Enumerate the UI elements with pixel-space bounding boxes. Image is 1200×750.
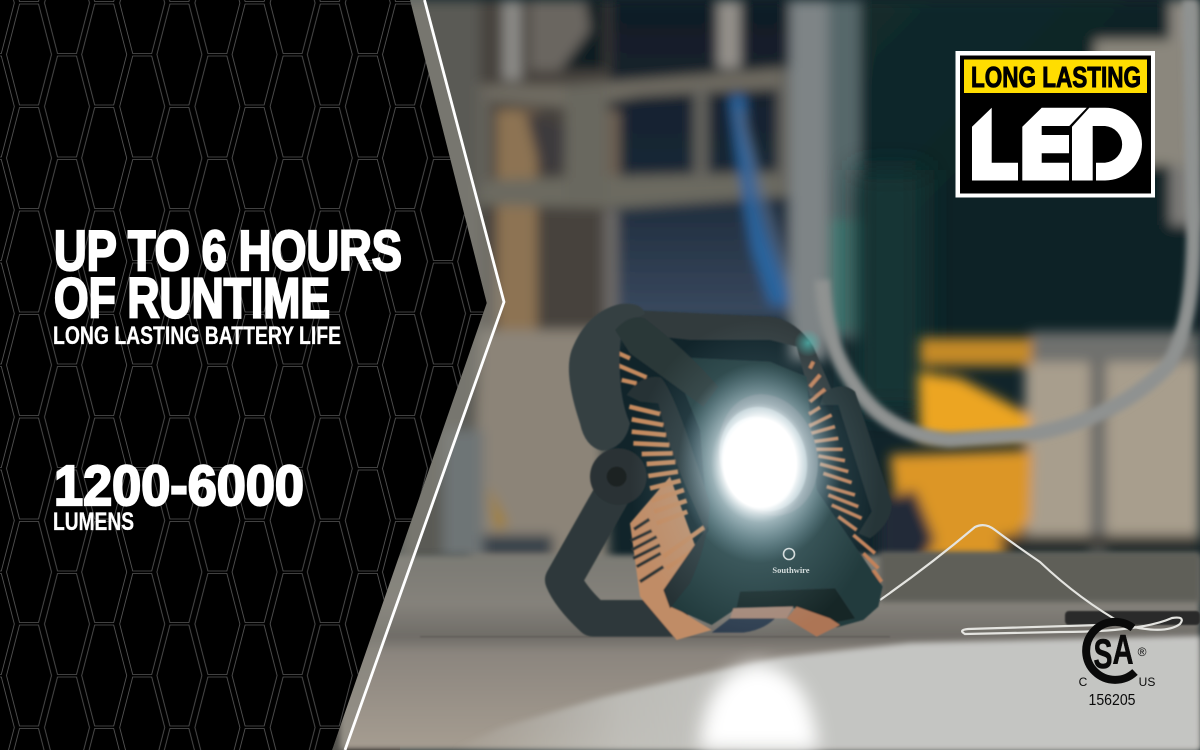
foot strip and orange foot bbox=[712, 607, 840, 637]
photo background: blurred workshop bbox=[340, 0, 1200, 750]
right orange fins bbox=[809, 362, 882, 582]
CSA certificate number: 156205 bbox=[1088, 692, 1136, 709]
floor crack shadow bbox=[420, 636, 890, 638]
Southwire logo on lamp: Southwire bbox=[772, 565, 810, 575]
right handle bbox=[820, 386, 892, 538]
subheading: battery life: LONG LASTING BATTERY LIFE bbox=[53, 322, 341, 350]
illuminated floor patch bbox=[451, 636, 1200, 750]
upper wall scene with struts bbox=[400, 0, 1200, 600]
orange fin base bbox=[630, 477, 712, 640]
lens bbox=[712, 408, 807, 516]
left orange fins upper bbox=[615, 352, 647, 383]
black chevron panel bbox=[0, 0, 487, 750]
CSA C label: C bbox=[1079, 675, 1088, 689]
light glow and lens flare bbox=[630, 320, 880, 640]
CSA US label: US bbox=[1139, 675, 1155, 689]
heading: runtime: UP TO 6 HOURS bbox=[54, 219, 402, 283]
work light product bbox=[563, 304, 892, 640]
white power cable bbox=[880, 525, 1182, 634]
Southwire logo on lamp bbox=[772, 548, 810, 575]
CSA letters: S bbox=[1094, 630, 1112, 677]
pivot circle bbox=[590, 448, 647, 505]
diagonal top arm bbox=[615, 317, 718, 407]
badge label: LONG LASTING bbox=[971, 62, 1141, 94]
heading: lumens value: 1200-6000 bbox=[54, 454, 304, 518]
background conduit pipe bbox=[822, 0, 1194, 440]
rear vents bbox=[631, 519, 663, 582]
white chevron line bbox=[345, 0, 504, 750]
main body bbox=[670, 357, 883, 627]
background yellow helmet and beige boxes bbox=[880, 332, 1200, 565]
translucent grey chevron band bbox=[332, 0, 505, 750]
top left handle bbox=[569, 304, 645, 451]
badge: long lasting LED bbox=[956, 51, 1155, 198]
LED letter E bbox=[1022, 108, 1087, 180]
heading: runtime: OF RUNTIME bbox=[54, 266, 330, 330]
LED letter L bbox=[972, 108, 1018, 180]
inner left grip bbox=[627, 377, 710, 608]
lens housing bbox=[704, 382, 833, 528]
LED letter D bbox=[1072, 108, 1142, 180]
dark object on floor bbox=[1065, 611, 1200, 625]
CSA certification mark bbox=[1079, 622, 1155, 709]
floor bbox=[340, 555, 1200, 750]
rear top arm bbox=[630, 311, 832, 397]
teal wash beside column bbox=[855, 170, 925, 410]
far right floor shade bbox=[880, 552, 1200, 602]
hexagon pattern bbox=[0, 0, 487, 750]
bottom dark foot panel bbox=[737, 588, 855, 623]
registered mark: ® bbox=[1138, 645, 1147, 659]
CSA certification mark: A bbox=[1112, 626, 1134, 673]
heading: runtime bbox=[54, 219, 402, 330]
stand leg frame bbox=[563, 480, 670, 618]
lens ring bbox=[707, 396, 820, 522]
subheading: lumens: LUMENS bbox=[53, 508, 134, 536]
left orange fins bbox=[629, 407, 704, 585]
CSA C ring bbox=[1086, 622, 1135, 680]
